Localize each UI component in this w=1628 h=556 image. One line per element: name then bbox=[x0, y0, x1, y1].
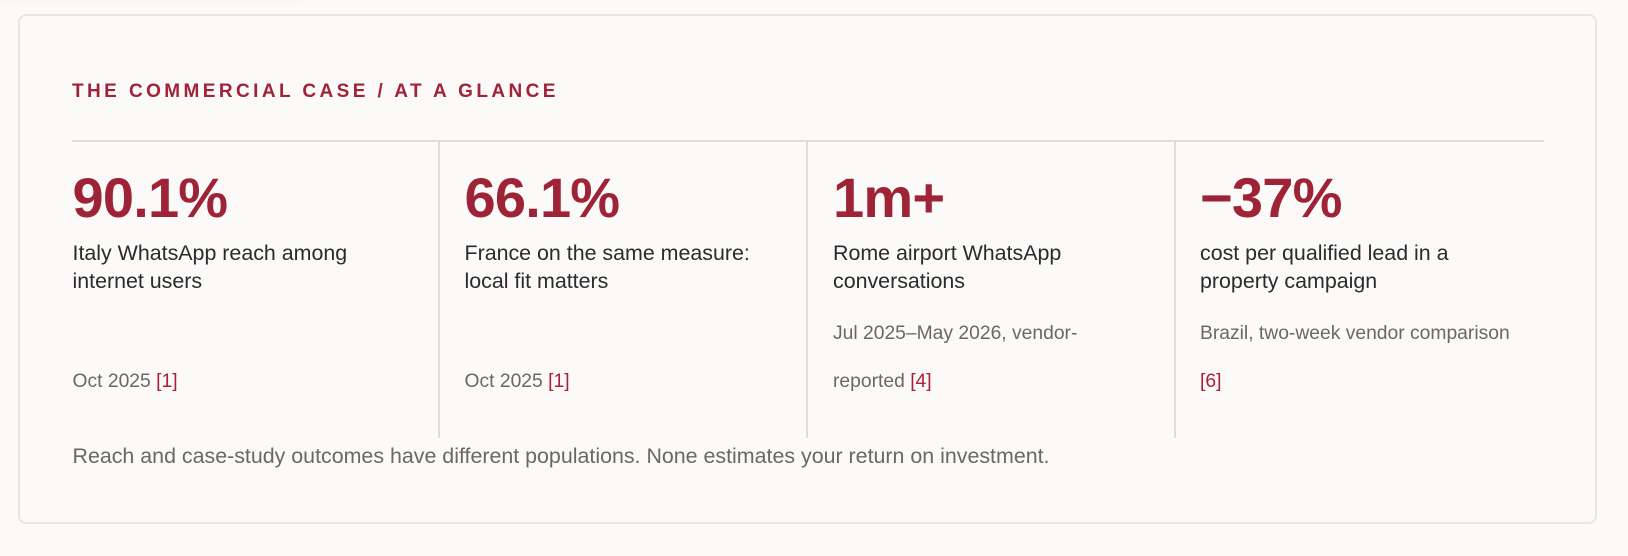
stat: Rome airport conversations bbox=[833, 166, 1077, 392]
stat: cost per qualified lead: property campaign bbox=[1200, 269, 1377, 293]
stat: France reach: Oct 2025 [1] bbox=[464, 371, 570, 392]
stat: Rome airport conversations: reported [4] bbox=[833, 371, 932, 392]
stat: Italy reach: 90.1% bbox=[72, 166, 227, 228]
stat: France reach: France on the same measure: bbox=[464, 241, 750, 265]
footnote: Reach and case-study outcomes have different populations. None estimates your return on investment. bbox=[72, 444, 1050, 468]
stat: Italy reach: internet users bbox=[72, 269, 202, 293]
stat: Rome airport conversations: Rome airport WhatsApp bbox=[833, 241, 1061, 265]
stat: France reach: local fit matters bbox=[464, 269, 608, 293]
stat: cost per qualified lead: cost per qualified lead in a bbox=[1200, 241, 1449, 265]
stat: Italy reach: Italy WhatsApp reach among bbox=[72, 241, 347, 265]
stat: cost per qualified lead bbox=[1200, 166, 1510, 392]
stat: Rome airport conversations: conversations bbox=[833, 269, 965, 293]
stat: cost per qualified lead: −37% bbox=[1200, 166, 1342, 228]
stat: France reach bbox=[464, 166, 750, 392]
stat: Italy reach: Oct 2025 [1] bbox=[72, 371, 178, 392]
heading: THE COMMERCIAL CASE / AT A GLANCE bbox=[72, 81, 559, 102]
stat: cost per qualified lead: Brazil, two-week vendor comparison bbox=[1200, 323, 1510, 344]
stat: Rome airport conversations: 1m+ bbox=[833, 166, 944, 228]
stat: Italy reach bbox=[72, 166, 347, 392]
stat: cost per qualified lead: [6] bbox=[1200, 371, 1221, 392]
stat: Rome airport conversations: Jul 2025–May 2026, vendor- bbox=[833, 323, 1077, 344]
stat: France reach: 66.1% bbox=[464, 166, 619, 228]
